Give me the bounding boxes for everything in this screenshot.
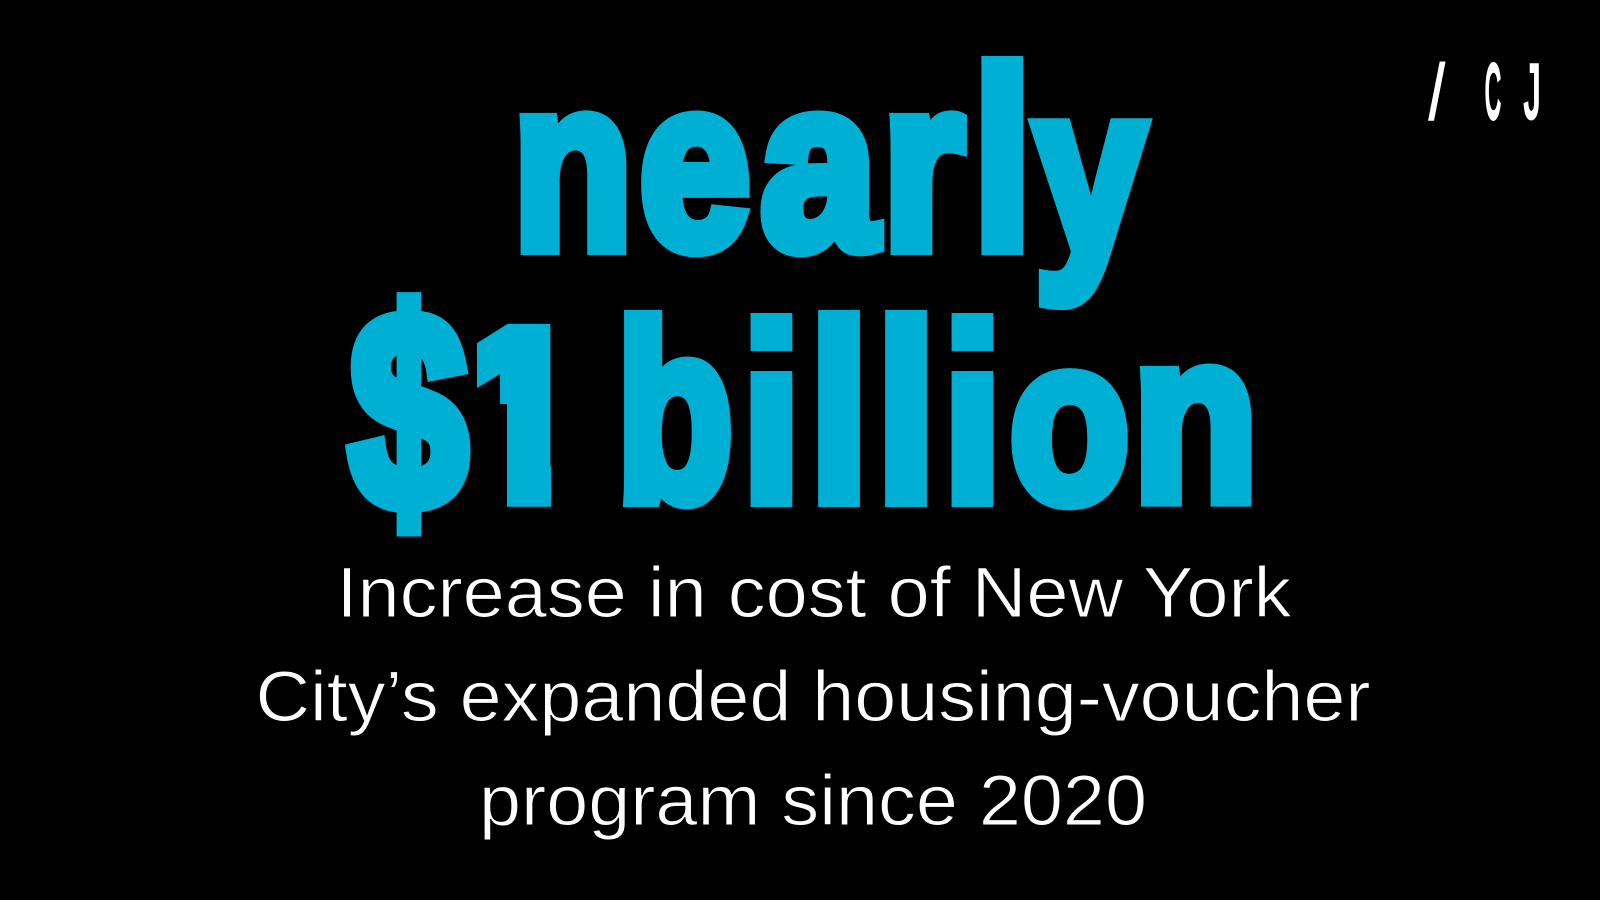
logo: / CJ: [1429, 49, 1540, 136]
headline: nearly $1 billion: [350, 19, 1257, 567]
logo C: C: [1485, 49, 1501, 134]
description text: [256, 554, 1370, 841]
headline line 1: y: [1035, 35, 1145, 304]
headline line 1: r: [883, 30, 963, 299]
headline line 2: $: [350, 257, 467, 567]
description line 1: Increase in cost of New York: [336, 554, 1292, 633]
headline line 2: l: [877, 273, 935, 552]
headline line 2: l: [810, 273, 868, 552]
headline line 2: 1: [450, 280, 589, 551]
headline line 2: i: [743, 273, 800, 552]
headline line 1: e: [640, 30, 750, 299]
logo J: J: [1524, 50, 1540, 135]
description line 2: City’s expanded housing-voucher: [256, 658, 1370, 737]
headline line 1: l: [974, 19, 1031, 301]
headline line 2: o: [1010, 292, 1129, 551]
headline line 1: [513, 19, 1145, 304]
headline line 2: n: [1133, 284, 1257, 550]
headline line 1: a: [761, 30, 878, 299]
logo slash: /: [1429, 49, 1445, 136]
headline line 2: b: [617, 274, 733, 553]
headline line 2: [350, 257, 1257, 567]
headline line 2: i: [944, 273, 1001, 552]
headline line 1: n: [513, 31, 632, 299]
description line 3: program since 2020: [479, 762, 1147, 841]
